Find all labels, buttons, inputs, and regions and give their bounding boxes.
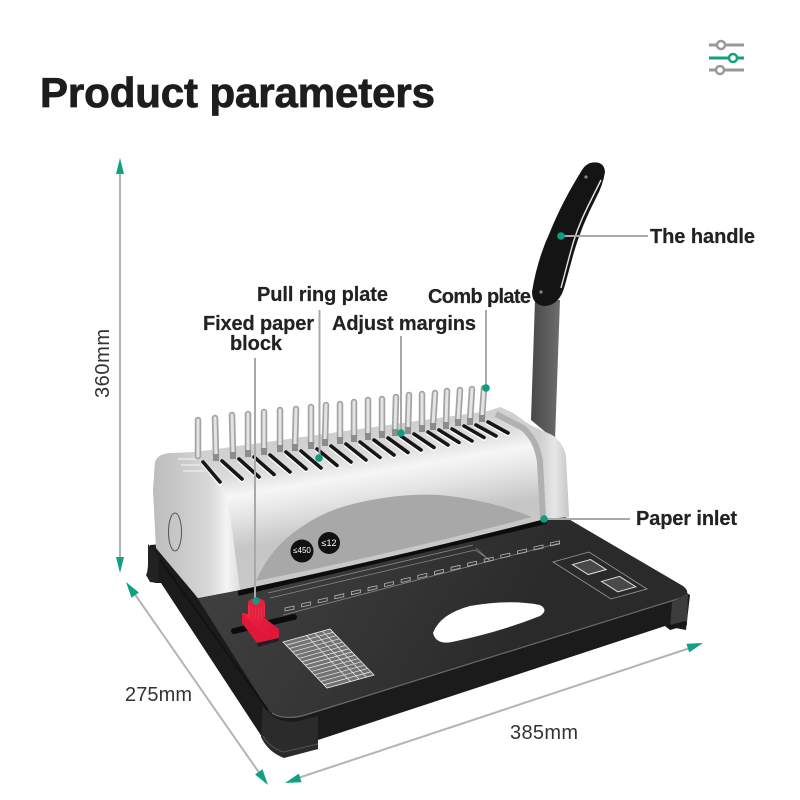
callout: paper inlet <box>540 508 737 530</box>
label: 385mm: 385mm <box>510 722 578 744</box>
callout: comb plate <box>428 286 531 392</box>
callout: comb plate: Comb plate <box>428 286 531 308</box>
callout: paper inlet: Paper inlet <box>636 508 737 530</box>
block base <box>242 613 279 643</box>
paper size table <box>283 629 374 688</box>
callout: pull ring plate <box>257 284 388 462</box>
product: comb binding machine <box>146 162 755 758</box>
height dimension arrow <box>116 158 124 573</box>
end cap oval <box>168 513 182 551</box>
callout: fixed paper block <box>203 313 314 605</box>
finger hole <box>433 602 544 643</box>
badge: 450 sheets: ≤450 <box>293 546 311 555</box>
block knob <box>248 598 265 620</box>
body shadow band <box>238 521 546 593</box>
front grey panel <box>256 495 532 581</box>
handle grip <box>532 162 605 306</box>
callout: adjust margins: Adjust margins <box>332 313 476 335</box>
handle arm <box>531 300 560 440</box>
callout: fixed paper block: block <box>230 333 283 355</box>
title: Product parameters <box>40 69 435 116</box>
depth dimension arrow <box>126 582 268 785</box>
label: 275mm: 275mm <box>125 684 192 706</box>
icon: settings sliders <box>709 41 744 74</box>
base plate <box>147 514 690 757</box>
right end cap <box>488 407 569 519</box>
callout: pull ring plate: Pull ring plate <box>257 284 388 306</box>
badge: 450 sheets <box>290 540 314 562</box>
callout: the handle <box>557 226 755 248</box>
comb slots <box>203 422 508 484</box>
callout: fixed paper block: Fixed paper <box>203 313 314 335</box>
callout: the handle: The handle <box>650 226 755 248</box>
base feet <box>146 544 688 758</box>
machine slot <box>234 617 294 631</box>
badge: 12 sheets: ≤12 <box>322 538 336 548</box>
machine body <box>153 407 569 598</box>
width dimension arrow <box>285 643 703 783</box>
comb teeth <box>198 388 484 461</box>
left end cap <box>153 452 240 598</box>
paper block <box>242 598 279 647</box>
instruction diagram <box>553 552 647 599</box>
paper guide ruler <box>268 541 560 615</box>
callout: adjust margins <box>332 313 476 437</box>
badge: 12 sheets <box>318 532 340 554</box>
label: 360mm: 360mm <box>92 329 114 398</box>
